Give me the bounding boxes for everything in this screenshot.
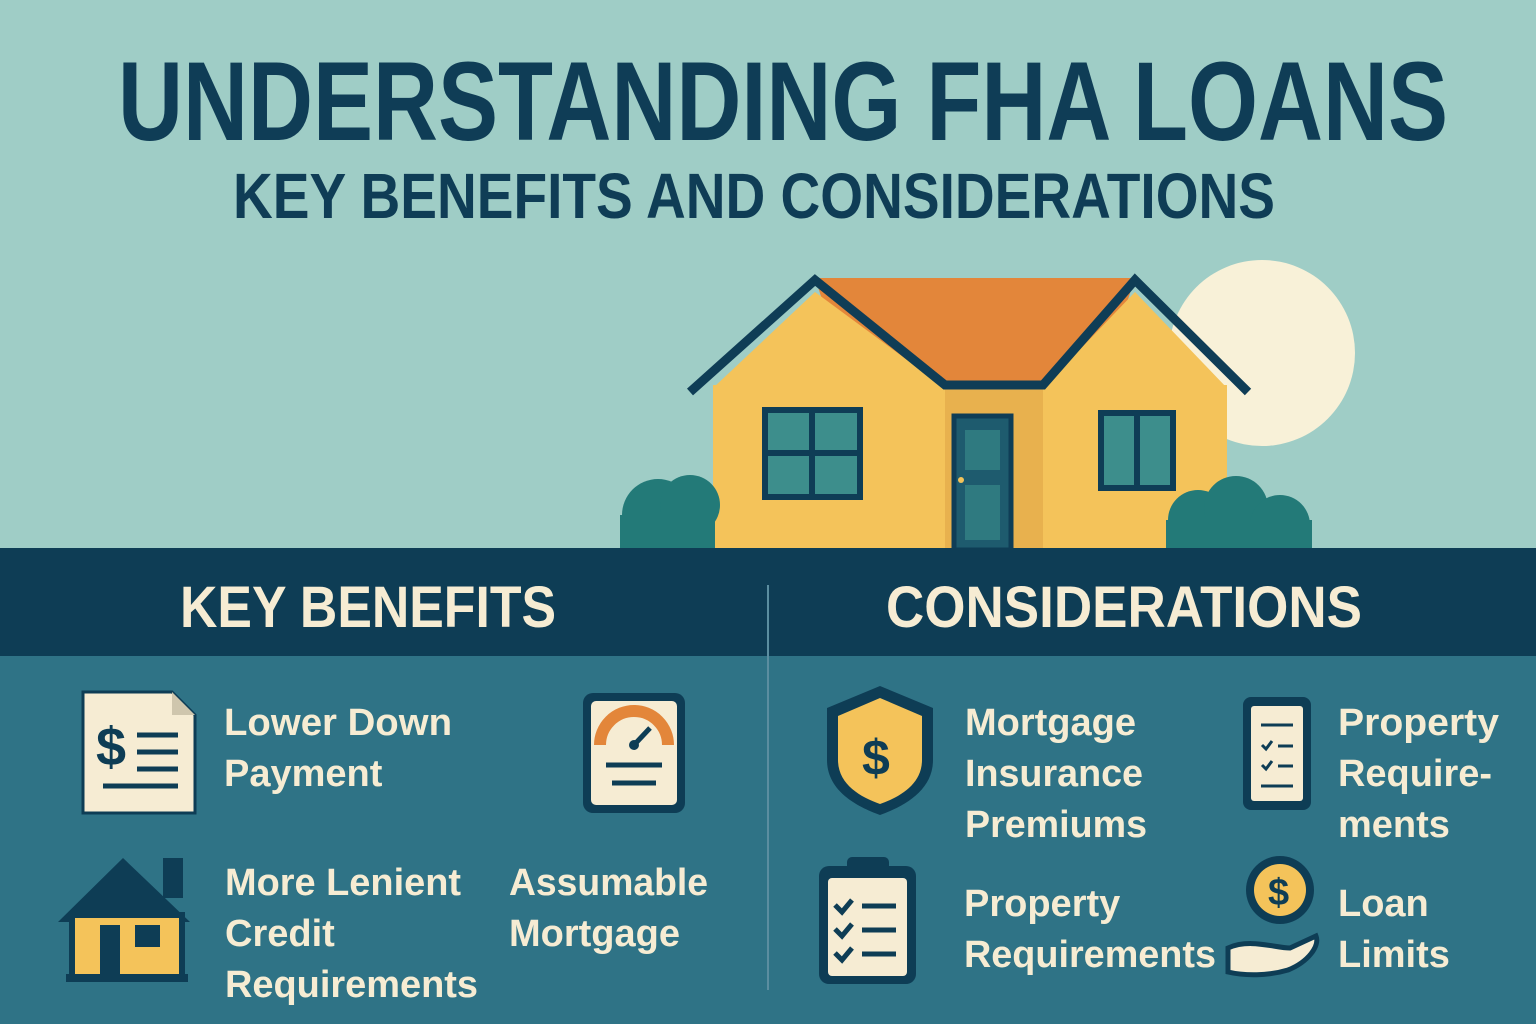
icon: dollar document [83, 692, 195, 813]
icon: shield: $ [862, 730, 890, 786]
text: loan limits [1338, 883, 1450, 976]
icon: credit gauge [583, 693, 685, 813]
heading: considerations: CONSIDERATIONS [886, 575, 1362, 640]
text: assumable mortgage: Assumable [509, 862, 708, 904]
icon: house [58, 858, 190, 982]
text: lenient credit [225, 862, 478, 1006]
text: lower down payment: Payment [224, 753, 383, 795]
text: property requirements right [1338, 702, 1499, 846]
text: lenient credit: More Lenient [225, 862, 461, 904]
text: lower down payment: Lower Down [224, 702, 452, 744]
text: property requirements right: Property [1338, 702, 1499, 744]
text: property requirements right: Require- [1338, 753, 1492, 795]
text: lenient credit: Credit [225, 913, 335, 955]
text: property requirements: Requirements [964, 934, 1216, 976]
text: mortgage insurance premiums: Mortgage [965, 702, 1136, 744]
icon: dollar document: $ [96, 717, 126, 777]
heading: key benefits: KEY BENEFITS [180, 575, 556, 640]
sun [1169, 260, 1355, 446]
lower panel [0, 656, 1536, 1024]
text: mortgage insurance premiums [965, 702, 1147, 846]
text: lower down payment [224, 702, 452, 795]
icon: coin in hand [1228, 856, 1317, 975]
header band [0, 548, 1536, 656]
text: mortgage insurance premiums: Premiums [965, 804, 1147, 846]
text: assumable mortgage [509, 862, 708, 955]
icon: checklist document [1243, 697, 1311, 810]
house illustration [620, 278, 1312, 555]
text: property requirements: Property [964, 883, 1120, 925]
text: property requirements [964, 883, 1216, 976]
text: property requirements right: ments [1338, 804, 1450, 846]
icon: clipboard [819, 857, 916, 984]
icon: shield [827, 686, 933, 815]
text: lenient credit: Requirements [225, 964, 478, 1006]
text: assumable mortgage: Mortgage [509, 913, 680, 955]
text: mortgage insurance premiums: Insurance [965, 753, 1143, 795]
text: loan limits: Limits [1338, 934, 1450, 976]
subtitle: KEY BENEFITS AND CONSIDERATIONS [233, 160, 1275, 232]
icon: coin in hand: $ [1268, 872, 1289, 914]
text: loan limits: Loan [1338, 883, 1429, 925]
